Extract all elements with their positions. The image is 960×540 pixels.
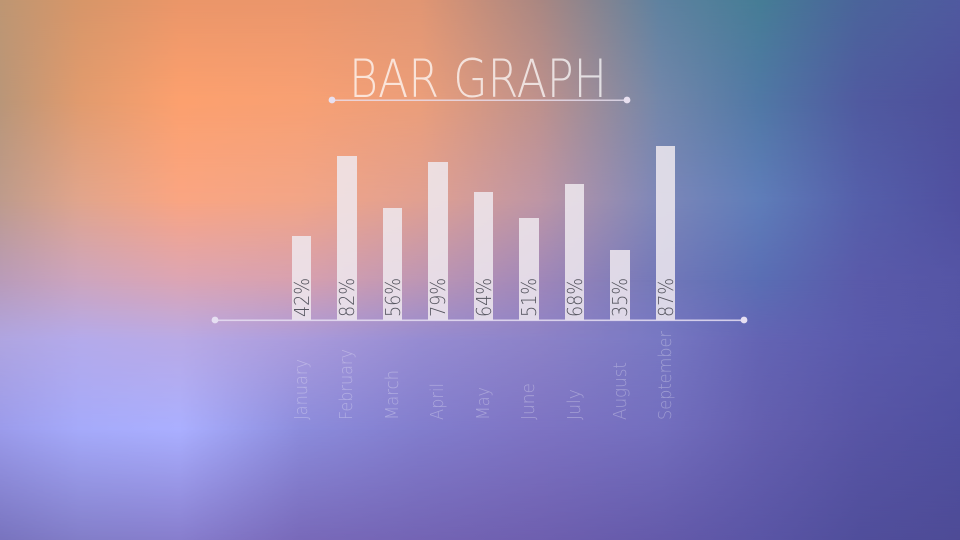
label: January: January — [291, 359, 312, 420]
bar: April 79%: 79% — [426, 278, 450, 317]
bar: July 68%: 68% — [563, 278, 587, 317]
bar: February 82% — [335, 156, 359, 320]
label: July: July — [564, 389, 585, 420]
title underline — [329, 97, 630, 103]
label: June: June — [518, 383, 539, 420]
bar: March 56%: 56% — [381, 278, 405, 317]
horizontal axis — [212, 317, 747, 323]
label: May: May — [473, 387, 494, 420]
label: September: September — [655, 330, 676, 420]
label: August: August — [610, 362, 631, 420]
bar: June 51%: 51% — [517, 278, 541, 317]
bar: January 42%: 42% — [290, 278, 314, 317]
month labels — [291, 330, 676, 420]
bar: August 35%: 35% — [608, 278, 632, 317]
bar: September 87%: 87% — [654, 278, 678, 317]
bar: March 56% — [381, 208, 405, 320]
bar: September 87% — [654, 146, 678, 320]
bar: June 51% — [517, 218, 541, 320]
label: February: February — [336, 349, 357, 420]
bar chart — [290, 146, 678, 320]
bar: January 42% — [290, 236, 314, 320]
bar: February 82%: 82% — [335, 278, 359, 317]
label: March: March — [382, 370, 403, 420]
bar: July 68% — [563, 184, 587, 320]
title: BAR GRAPH — [349, 49, 607, 110]
label: April: April — [427, 383, 448, 420]
bar: April 79% — [426, 162, 450, 320]
bar: May 64% — [472, 192, 496, 320]
bar: May 64%: 64% — [472, 278, 496, 317]
bar: August 35% — [608, 250, 632, 320]
